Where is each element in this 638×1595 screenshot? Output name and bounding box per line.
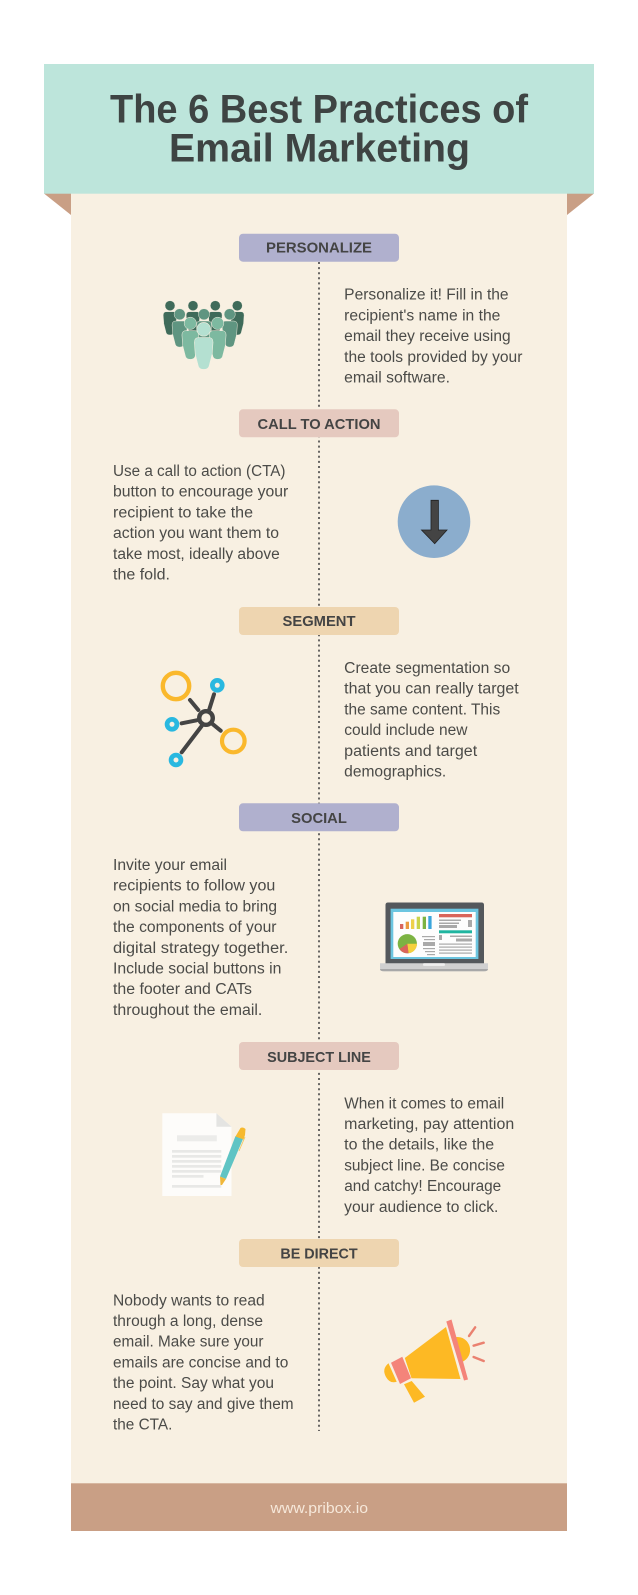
- text: personalize: the tools provided by your: [344, 349, 522, 366]
- ribbon fold right: [567, 194, 594, 215]
- section: social: [113, 803, 488, 1019]
- icon: network nodes: [163, 673, 245, 765]
- text: segment: [344, 660, 519, 780]
- heading pill: segment: SEGMENT: [282, 613, 356, 630]
- text: social: recipients to follow you: [113, 878, 275, 895]
- heading pill: personalize: PERSONALIZE: [266, 240, 372, 257]
- text: social: the footer and CATs: [113, 981, 252, 998]
- icon: document and pen: [162, 1113, 246, 1196]
- text: social: Include social buttons in: [113, 960, 281, 978]
- footer: www.pribox.io: [269, 1500, 368, 1517]
- text: social: digital strategy together.: [113, 940, 288, 957]
- text: segment: demographics.: [344, 764, 446, 780]
- text: call to action: button to encourage your: [113, 484, 288, 501]
- heading pill: social: SOCIAL: [291, 810, 347, 827]
- text: subject line: marketing, pay attention: [344, 1116, 514, 1133]
- icon: laptop with charts: [380, 902, 488, 971]
- text: segment: Create segmentation so: [344, 660, 510, 677]
- heading pill: be direct: BE DIRECT: [280, 1245, 358, 1262]
- ribbon fold left: [44, 194, 71, 215]
- heading pill: subject line: [239, 1042, 399, 1070]
- text: be direct: through a long, dense: [113, 1313, 263, 1330]
- text: personalize: [344, 286, 522, 386]
- text: call to action: take most, ideally above: [113, 546, 280, 563]
- heading pill: subject line: SUBJECT LINE: [267, 1049, 371, 1066]
- section: be direct: [113, 1239, 484, 1434]
- text: be direct: the CTA.: [113, 1416, 172, 1434]
- text: segment: patients and target: [344, 743, 478, 760]
- footer: [71, 1483, 567, 1531]
- text: social: [113, 857, 288, 1019]
- text: social: throughout the email.: [113, 1002, 262, 1019]
- title: The 6 Best Practices of: [110, 88, 529, 132]
- text: personalize: Personalize it! Fill in the: [344, 286, 509, 304]
- heading pill: be direct: [239, 1239, 399, 1267]
- text: subject line: When it comes to email: [344, 1095, 504, 1112]
- text: call to action: [113, 463, 288, 584]
- text: subject line: and catchy! Encourage: [344, 1178, 501, 1195]
- text: be direct: emails are concise and to: [113, 1354, 288, 1371]
- text: be direct: Nobody wants to read: [113, 1292, 265, 1309]
- text: social: the components of your: [113, 919, 276, 936]
- text: be direct: need to say and give them: [113, 1396, 294, 1413]
- text: social: on social media to bring: [113, 898, 277, 915]
- text: be direct: [113, 1292, 294, 1434]
- text: subject line: [344, 1095, 514, 1216]
- text: call to action: action you want them to: [113, 525, 279, 542]
- heading pill: segment: [239, 607, 399, 635]
- heading pill: personalize: [239, 234, 399, 262]
- section: personalize: [163, 234, 522, 386]
- dotted timeline: [318, 262, 320, 1431]
- section: segment: [163, 607, 519, 780]
- text: segment: that you can really target: [344, 681, 519, 698]
- title: [110, 88, 529, 171]
- text: call to action: Use a call to action (CTA): [113, 463, 286, 480]
- title banner: [44, 64, 594, 194]
- heading pill: call to action: [239, 409, 399, 437]
- text: subject line: subject line. Be concise: [344, 1157, 505, 1174]
- text: be direct: email. Make sure your: [113, 1334, 264, 1351]
- text: personalize: email they receive using: [344, 328, 511, 345]
- section: subject line: [162, 1042, 514, 1216]
- text: call to action: the fold.: [113, 566, 170, 584]
- text: segment: could include new: [344, 722, 468, 739]
- section: call to action: [113, 409, 470, 584]
- text: social: Invite your email: [113, 857, 227, 874]
- icon: megaphone: [384, 1320, 484, 1403]
- text: segment: the same content. This: [344, 701, 500, 718]
- text: be direct: the point. Say what you: [113, 1375, 274, 1392]
- text: personalize: recipient's name in the: [344, 307, 500, 324]
- text: call to action: recipient to take the: [113, 504, 253, 521]
- text: subject line: your audience to click.: [344, 1199, 498, 1216]
- heading pill: social: [239, 803, 399, 831]
- text: personalize: email software.: [344, 370, 450, 386]
- text: subject line: to the details, like the: [344, 1137, 494, 1154]
- icon: down arrow in circle: [398, 485, 470, 558]
- title: Email Marketing: [169, 127, 470, 171]
- heading pill: call to action: CALL TO ACTION: [258, 416, 380, 433]
- icon: group of people: [163, 301, 244, 369]
- panel: cream background: [71, 193, 567, 1484]
